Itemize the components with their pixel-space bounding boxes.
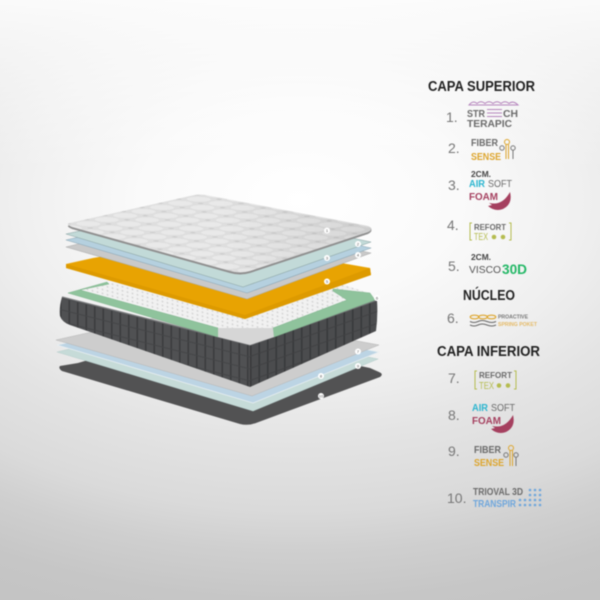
item 5: 2cm visco 30d xyxy=(448,252,527,277)
layer number badges: 4 xyxy=(357,252,360,258)
item 2: fiber sense xyxy=(448,138,515,163)
item 1: strech terapic xyxy=(446,102,518,130)
layer 4: grey sheet xyxy=(66,215,371,299)
item 10: trioval 3d transpir xyxy=(447,487,541,510)
heading: capa inferior: CAPA INFERIOR xyxy=(437,344,540,360)
item 6: proactive spring poket: 6. xyxy=(447,310,459,326)
item 9: fiber sense xyxy=(448,443,518,469)
item 6: proactive spring poket: SPRING POKET xyxy=(498,322,537,328)
item 3: 2cm air soft foam: 3. xyxy=(448,177,460,193)
item 6: proactive spring poket: PROACTIVE xyxy=(498,314,529,320)
core: mattress side panels xyxy=(60,297,377,387)
layer number badges: 1 xyxy=(326,228,329,233)
item 3: 2cm air soft foam: FOAM xyxy=(469,192,498,203)
layer number badges: 7 xyxy=(357,349,360,354)
item 1: strech terapic: STR xyxy=(467,109,486,120)
layer 10: dark base xyxy=(59,330,382,425)
layer number badges xyxy=(318,228,380,399)
layer number badges: 2 xyxy=(357,242,360,246)
layer number badges: 6 xyxy=(376,296,379,300)
layer 8: blue sheet xyxy=(57,315,379,403)
item 9: fiber sense: 9. xyxy=(448,443,460,459)
item 3: 2cm air soft foam: SOFT xyxy=(488,179,512,190)
layer number badges: 8 xyxy=(320,374,323,378)
item 1: strech terapic: CH xyxy=(503,109,518,120)
core: green foam frame, right xyxy=(273,289,375,337)
item 10: trioval 3d transpir: TRIOVAL 3D xyxy=(473,487,523,498)
item 1: strech terapic: TERAPIC xyxy=(467,119,512,130)
item 8: air soft foam: 8. xyxy=(448,407,460,423)
item 4: refort tex: 4. xyxy=(447,217,459,233)
layer number badges: 10 xyxy=(319,394,324,398)
layer 7: grey sheet xyxy=(56,310,379,396)
item 8: air soft foam: FOAM xyxy=(472,416,501,427)
item 4: refort tex: REFORT xyxy=(474,222,507,232)
item 5: 2cm visco 30d: 2CM. xyxy=(471,252,491,262)
item 3: 2cm air soft foam xyxy=(448,169,512,210)
illustration: exploded mattress layers xyxy=(56,195,382,425)
item 7: refort tex: REFORT xyxy=(479,370,513,380)
layer 1: quilted top xyxy=(68,195,372,274)
item 10: trioval 3d transpir: 10. xyxy=(447,490,466,506)
item 8: air soft foam: AIR xyxy=(472,403,489,414)
item 3: 2cm air soft foam: 2CM. xyxy=(471,169,491,179)
item 3: 2cm air soft foam: AIR xyxy=(469,179,486,190)
item 7: refort tex: 7. xyxy=(448,370,460,386)
layer 5: orange visco foam xyxy=(66,240,371,319)
item 4: refort tex: TEX xyxy=(474,232,488,243)
item 5: 2cm visco 30d: VISCO xyxy=(469,265,501,276)
item 5: 2cm visco 30d: 5. xyxy=(448,258,460,274)
item 5: 2cm visco 30d: 30D xyxy=(502,261,527,277)
item 2: fiber sense: SENSE xyxy=(471,152,501,163)
item 7: refort tex: TEX xyxy=(479,381,494,392)
item 4: refort tex xyxy=(447,217,511,243)
item 9: fiber sense: FIBER xyxy=(474,445,502,456)
item 10: trioval 3d transpir: TRANSPIR xyxy=(473,499,517,510)
core: fabric label xyxy=(218,328,274,345)
core: pocket springs xyxy=(80,280,368,328)
layer number badges: 9 xyxy=(357,364,360,368)
item 7: refort tex xyxy=(448,370,516,392)
heading: capa superior: CAPA SUPERIOR xyxy=(428,79,535,95)
item 2: fiber sense: FIBER xyxy=(471,138,499,149)
core: green foam frame, left xyxy=(68,282,218,337)
layer number badges: 3 xyxy=(326,256,329,260)
layer 9: teal sheet xyxy=(57,320,378,411)
item 6: proactive spring poket xyxy=(447,310,537,328)
heading: nucleo: NÚCLEO xyxy=(463,286,515,304)
item 2: fiber sense: 2. xyxy=(448,140,460,156)
item 1: strech terapic: 1. xyxy=(446,109,458,125)
item 9: fiber sense: SENSE xyxy=(474,458,504,469)
layer 3: blue sheet xyxy=(66,210,371,293)
item 8: air soft foam xyxy=(448,403,515,433)
item 8: air soft foam: SOFT xyxy=(491,403,515,414)
layer 2: teal sheet xyxy=(66,205,371,287)
layer number badges: 5 xyxy=(326,279,329,284)
